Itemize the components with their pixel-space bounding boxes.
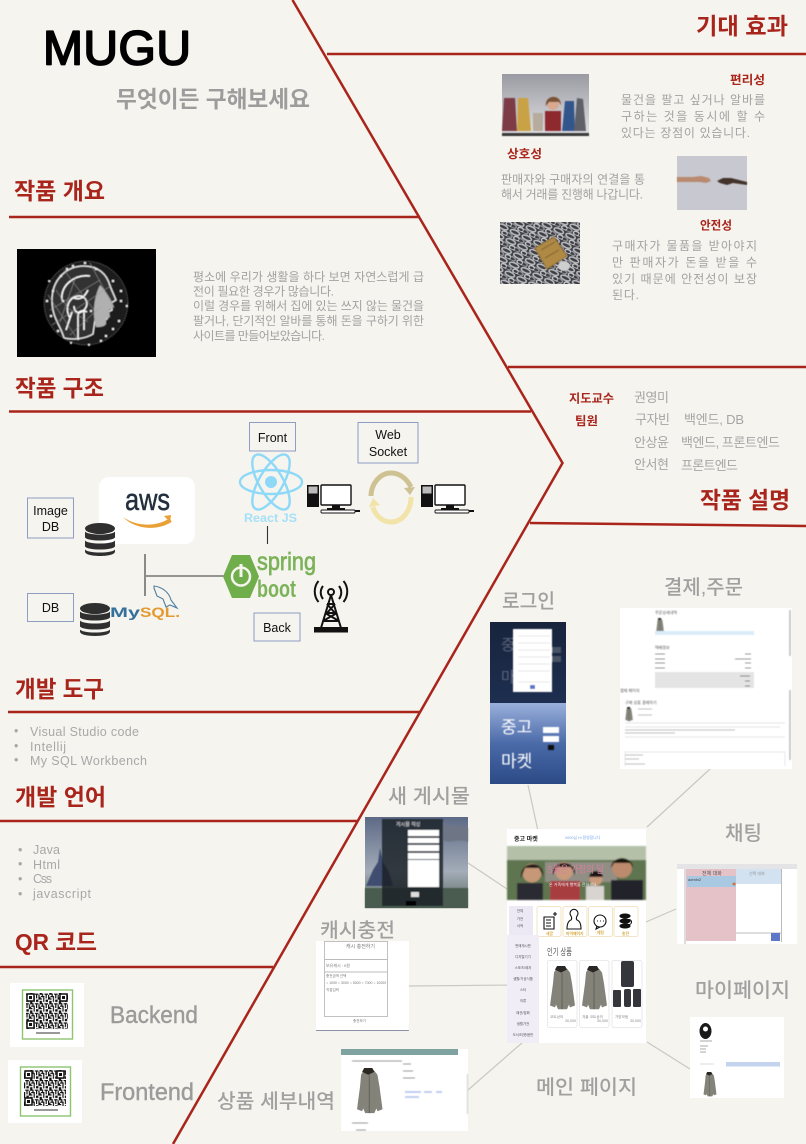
list: dev tools: My SQL Workbench (30, 754, 147, 768)
photo: padlock on chains (500, 222, 580, 284)
names and roles: 백엔드, 프론트엔드 (681, 435, 780, 450)
screenshot: main page: 가전 (517, 916, 523, 921)
text: safety: 구매자가 물품을 받아야지 (612, 239, 757, 253)
logo: Spring Boot: boot (257, 576, 296, 603)
screenshot: payment: 택배정보 (655, 644, 670, 650)
screenshot: login (490, 622, 566, 784)
logo: Spring Boot: spring (257, 548, 316, 576)
names and roles: 안서현 (634, 457, 669, 472)
screenshot: main page: 겨울 코트상의 (582, 1014, 603, 1019)
text: convenience (621, 93, 765, 140)
text: convenience: 있다는 장점이 있습니다. (621, 126, 750, 140)
list: dev tools (14, 724, 147, 768)
sidebar (507, 935, 539, 1043)
logo: AWS (99, 477, 195, 544)
logo: Spring Boot (223, 548, 316, 603)
names and roles: 프론트엔드 (681, 458, 738, 473)
photo: touching hands (677, 156, 747, 210)
label: 안전성: 안전성 (700, 218, 732, 232)
box: Back: Back (263, 621, 292, 635)
text: safety (612, 239, 757, 302)
text: interaction (501, 172, 645, 202)
screenshot: main page: 의류 (520, 998, 526, 1003)
list: dev tools: • (14, 724, 18, 738)
overview text: 이럴 경우를 위해서 집에 있는 쓰지 않는 물건을 (193, 299, 424, 313)
label: advisor: 지도교수 (569, 392, 614, 406)
list: languages: javascript (32, 887, 92, 901)
list: languages: • (18, 887, 22, 901)
logo: MySQL: My (110, 604, 140, 620)
QR code: backend (10, 983, 84, 1047)
screenshot: main page: 30,000 (630, 1019, 641, 1023)
screenshot: main page: 30,000 (565, 1019, 576, 1023)
list: dev tools: • (14, 739, 18, 753)
screenshot: cash charge: 캐시 충전하기 (346, 943, 375, 950)
icon: database (db) (80, 603, 110, 636)
screenshot: main page: 중고 마켓 (514, 835, 538, 843)
text: safety: 있기 때문에 안전성이 보장 (612, 272, 757, 286)
screenshot: main page: 판매게시판 (515, 943, 531, 948)
logo: React JS: React JS (244, 513, 297, 525)
heading: 작품 개요: 작품 개요 (14, 178, 105, 204)
screenshot: main page: 생활가전 (517, 1021, 529, 1026)
screenshot: new post: 게시물 작성 (396, 821, 420, 828)
list: dev tools: Visual Studio code (30, 725, 139, 739)
screenshot: login: 중 (501, 637, 515, 654)
list: languages: • (18, 843, 22, 857)
label: 상품 세부내역: 상품 세부내역 (217, 1090, 335, 1113)
screenshot: main page: 스포츠/레저 (515, 965, 531, 970)
label: Frontend: Frontend (100, 1079, 194, 1106)
icon: cycle arrows (369, 473, 415, 522)
screenshot: main page: 코트상의 (550, 1014, 563, 1019)
list: languages: • (18, 872, 22, 886)
screenshot: main page: 0000님 Hi 환영합니다 (565, 835, 601, 840)
heading: 기대 효과: 기대 효과 (696, 13, 788, 39)
connector lines to main page (409, 769, 710, 1090)
screenshot: main page: 패션/잡화 (516, 1010, 530, 1015)
screenshot: main page: 새글 (546, 931, 553, 936)
list: languages: Html (33, 858, 60, 872)
screenshot: new post (365, 817, 468, 908)
label: 마이페이지: 마이페이지 (695, 979, 790, 1002)
screenshot: payment: 구매 상품 결제하기 (625, 699, 657, 705)
overview text: 사이트를 만들어보았습니다. (193, 329, 325, 343)
screenshot: my page (690, 1017, 784, 1098)
list: languages: Java (33, 843, 60, 857)
screenshot: cash charge (316, 941, 409, 1031)
heading: 작품 구조: 작품 구조 (15, 375, 104, 401)
box: Front (250, 422, 296, 451)
names and roles: 권영미 (634, 390, 669, 405)
screenshot: cash charge: 충전하기 (353, 1018, 366, 1023)
box: DB: DB (42, 601, 59, 615)
text: interaction: 해서 거래를 진행해 나갑니다. (501, 186, 643, 202)
screenshot: main page: 충전 (622, 931, 629, 936)
icon: antenna tower (315, 581, 347, 632)
screenshot: product detail (341, 1049, 468, 1131)
box: Web Socket: Socket (369, 445, 408, 459)
heading: 개발 도구: 개발 도구 (15, 676, 104, 702)
icons: post, person, chat, coins (544, 909, 632, 929)
screenshot: login: 마 (501, 669, 515, 686)
screenshot: main page: 5월은 가정의 달 (548, 864, 604, 876)
screenshot: login: 중고 (501, 718, 532, 737)
logo: MySQL (110, 586, 180, 620)
overview text: 팔거나, 단기적인 알바를 통해 돈을 구하기 위한 (193, 314, 424, 328)
menu icon cards (537, 906, 638, 936)
screenshot: main page: 채팅 (597, 930, 604, 935)
screenshot: main page: 도서/티켓/음반 (513, 1032, 533, 1037)
screenshot: main page (507, 829, 646, 1043)
screenshot: main page: 전체 (517, 908, 523, 913)
label: 채팅: 채팅 (725, 822, 762, 845)
screenshot: main page: 스타 (520, 987, 527, 992)
advisor and team (569, 390, 780, 473)
screenshot: chat: 선택 대화 (749, 870, 765, 876)
heading: 작품 설명: 작품 설명 (700, 487, 790, 513)
names and roles (634, 390, 780, 473)
box: Web Socket: Web (375, 428, 401, 442)
list: languages: • (18, 857, 22, 871)
box: Image DB (28, 498, 74, 538)
product cards (548, 960, 642, 1028)
hero family photo (507, 846, 646, 900)
screenshot: main page: 마이페이지 (566, 931, 584, 936)
list: dev tools: Intellij (30, 740, 66, 754)
label: 새 게시물: 새 게시물 (388, 785, 470, 808)
names and roles: 안상윤 (634, 435, 669, 450)
screenshot: main page: 서적 (517, 923, 523, 928)
text: convenience: 물건을 팔고 싶거나 알바를 (621, 93, 765, 107)
screenshot: main page: 생활/가공식품 (513, 976, 533, 981)
list: languages: Css (33, 872, 52, 886)
screenshot: cash charge: 보유캐시 : 0원 (326, 962, 350, 968)
label: 메인 페이지: 메인 페이지 (536, 1076, 637, 1099)
box: DB (28, 594, 74, 622)
names and roles: 구자빈 (635, 412, 670, 427)
connector lines (145, 526, 268, 596)
screenshot: chat: admin2 (688, 877, 702, 882)
logo: AWS: aws (125, 482, 170, 517)
screenshot: payment: 결제 페이지 (620, 687, 640, 693)
screenshot: cash charge: 직접입력 (326, 987, 339, 992)
text: convenience: 구하는 것을 동시에 할 수 (621, 110, 765, 124)
screenshot: payment (620, 608, 792, 769)
screenshot: main page: 온 가족에게 행복을 전하세요 (549, 881, 597, 887)
logo: MUGU: MUGU (43, 22, 191, 76)
label: 로그인: 로그인 (502, 590, 555, 613)
product heading: 인기 상품 (547, 947, 572, 957)
icon: database (image db) (85, 523, 115, 556)
QR code: frontend (8, 1060, 82, 1123)
text: safety: 만 판매자가 돈을 받을 수 (612, 256, 757, 270)
label: 결제,주문: 결제,주문 (664, 576, 743, 599)
label: 캐시충전: 캐시충전 (320, 919, 395, 942)
overview text: 평소에 우리가 생활을 하다 보면 자연스럽게 급 (193, 270, 424, 284)
heading: QR 코드: QR 코드 (15, 929, 97, 955)
text: interaction: 판매자와 구매자의 연결을 통 (501, 172, 645, 186)
box: Back (254, 613, 300, 641)
screenshot: main page: 디지털기기 (515, 954, 531, 959)
screenshot: cash charge: 충전금액 선택 (326, 973, 346, 978)
label: 편리성: 편리성 (730, 73, 765, 87)
screenshot: chat (677, 864, 797, 944)
screenshot: main page: 가방모음 (615, 1014, 629, 1019)
architecture diagram (28, 422, 474, 641)
screenshot: cash charge: ○ 1000 ○ 3000 ○ 5000 ○ 7000 ○ 10000 (326, 981, 386, 985)
logo: MySQL: SQL. (140, 604, 180, 620)
names and roles: 백엔드, DB (684, 412, 744, 427)
logo: React JS (240, 449, 302, 525)
screenshot: main page: 30,000 (597, 1019, 608, 1023)
overview image: brain (17, 249, 156, 357)
box: Web Socket (358, 422, 418, 463)
box: Image DB: Image (33, 504, 68, 518)
photo: shopping bags (502, 74, 589, 136)
icon: computer right (421, 485, 474, 513)
icon: computer left (307, 485, 360, 513)
subtitle: 무엇이든 구해보세요 (116, 86, 310, 112)
box: Front: Front (258, 431, 288, 445)
label: Backend: Backend (110, 1002, 198, 1029)
heading: 개발 언어: 개발 언어 (15, 784, 106, 810)
screenshot: login: 마켓 (501, 752, 532, 771)
label: 상호성: 상호성 (507, 147, 542, 161)
list: dev tools: • (14, 753, 18, 767)
overview text: 전이 필요한 경우가 많습니다. (193, 284, 334, 298)
label: team: 팀원 (575, 414, 598, 428)
list: languages (18, 843, 92, 901)
text: safety: 된다. (612, 288, 639, 302)
screenshot: chat: 전체 대화 (702, 870, 722, 877)
screenshot: payment: 주문상세내역 (655, 609, 677, 615)
box: Image DB: DB (42, 520, 59, 534)
overview text (193, 270, 424, 343)
